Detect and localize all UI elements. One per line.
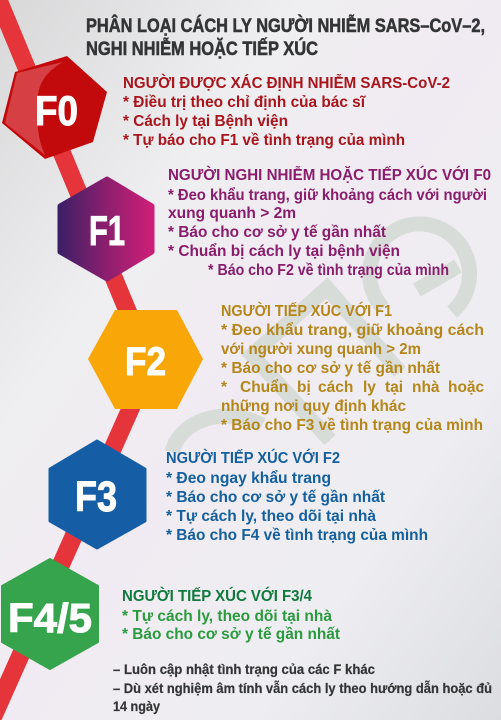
title bbox=[86, 13, 485, 60]
panel: F2 bbox=[88, 302, 485, 434]
notes: – Dù xét nghiệm âm tính vẫn cách ly theo hướng dẫn hoặc đủ bbox=[113, 681, 492, 696]
text: F1 instructions: xung quanh > 2m bbox=[168, 205, 296, 222]
text: F3 instructions: * Đeo ngay khẩu trang bbox=[166, 470, 331, 487]
text: F2 instructions: NGƯỜI TIẾP XÚC VỚI F1 bbox=[221, 302, 392, 320]
icon: F0 hexagon: F0 bbox=[35, 87, 78, 134]
text: F4/5 instructions: * Báo cho cơ sở y tế gần nhất bbox=[122, 626, 340, 643]
icon: F1 hexagon: F1 bbox=[89, 207, 125, 254]
text: F2 instructions: * Đeo khẩu trang, giữ khoảng cách bbox=[221, 322, 484, 339]
text: F2 instructions: * Báo cho F3 về tình trạng của mình bbox=[221, 417, 483, 434]
text: F4/5 instructions: * Tự cách ly, theo dõi tại nhà bbox=[122, 608, 332, 625]
text: F2 instructions: bị bbox=[297, 379, 311, 396]
text: F0 instructions: * Cách ly tại Bệnh viện bbox=[123, 113, 288, 130]
text: F1 instructions: NGƯỜI NGHI NHIỄM HOẶC TIẾP XÚC VỚI F0 bbox=[168, 166, 491, 184]
text: F3 instructions: NGƯỜI TIẾP XÚC VỚI F2 bbox=[166, 449, 340, 467]
text: F3 instructions: * Tự cách ly, theo dõi tại nhà bbox=[166, 508, 376, 525]
text: F2 instructions: * bbox=[221, 379, 228, 396]
text: F2 instructions: những nơi quy định khác bbox=[221, 398, 406, 415]
title: NGHI NHIỄM HOẶC TIẾP XÚC bbox=[86, 36, 318, 60]
icon: F2 hexagon bbox=[88, 310, 203, 409]
panel: F4/5 bbox=[2, 559, 340, 669]
text: F1 instructions: * Đeo khẩu trang, giữ khoảng cách với người bbox=[168, 187, 487, 204]
text: F2 instructions: tại bbox=[385, 379, 403, 396]
text: F1 instructions: * Báo cho cơ sở y tế gần nhất bbox=[168, 224, 386, 241]
icon: F3 hexagon bbox=[50, 441, 145, 548]
text: F3 instructions: * Báo cho cơ sở y tế gần nhất bbox=[166, 489, 385, 506]
text: F2 instructions: Chuẩn bbox=[240, 379, 288, 396]
text: F1 instructions: * Chuẩn bị cách ly tại bệnh viện bbox=[168, 243, 400, 260]
text: F1 instructions bbox=[168, 166, 491, 279]
notes: 14 ngày bbox=[113, 699, 160, 714]
icon: F4/5 hexagon bbox=[2, 559, 98, 669]
red connecting line bbox=[0, 0, 150, 720]
text: F0 instructions: NGƯỜI ĐƯỢC XÁC ĐỊNH NHIỄM SARS-CoV-2 bbox=[123, 74, 450, 92]
text: F2 instructions: ly bbox=[363, 379, 376, 396]
panel: F0 bbox=[2, 56, 450, 159]
text: F2 instructions bbox=[221, 302, 485, 434]
text: F0 instructions bbox=[123, 74, 450, 149]
text: F2 instructions: * Báo cho cơ sở y tế gần nhất bbox=[221, 360, 440, 377]
icon: F2 hexagon: F2 bbox=[125, 340, 166, 384]
text: F4/5 instructions: NGƯỜI TIẾP XÚC VỚI F3/4 bbox=[122, 587, 312, 605]
text: F3 instructions: * Báo cho F4 về tình trạng của mình bbox=[166, 527, 428, 544]
panel: F1 bbox=[60, 166, 491, 279]
notes bbox=[113, 662, 492, 714]
text: F2 instructions: với người xung quanh > 2m bbox=[221, 341, 421, 358]
text: F0 instructions: * Điều trị theo chỉ định của bác sĩ bbox=[123, 94, 367, 111]
notes: – Luôn cập nhật tình trạng của các F khác bbox=[113, 662, 375, 677]
icon: F1 hexagon bbox=[60, 179, 152, 279]
text: F2 instructions: hoặc bbox=[448, 379, 485, 396]
icon: F4/5 hexagon: F4/5 bbox=[8, 595, 92, 641]
text: F2 instructions: nhà bbox=[412, 379, 440, 396]
text: F0 instructions: * Tự báo cho F1 về tình trạng của mình bbox=[123, 132, 405, 149]
text: F4/5 instructions bbox=[122, 587, 340, 643]
icon: F0 hexagon bbox=[2, 56, 107, 159]
text: F3 instructions bbox=[166, 449, 428, 544]
text: F1 instructions: * Báo cho F2 về tình trạng của mình bbox=[208, 262, 449, 279]
text: F2 instructions: cách bbox=[318, 379, 353, 396]
icon: F3 hexagon: F3 bbox=[75, 473, 117, 521]
panel: F3 bbox=[50, 441, 428, 548]
